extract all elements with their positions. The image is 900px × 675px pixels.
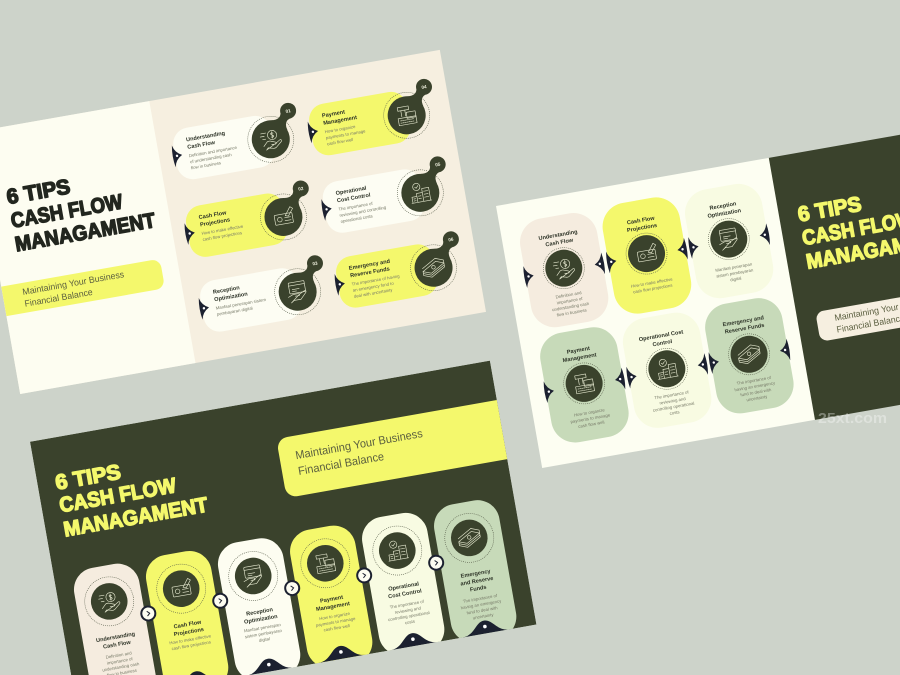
subtitle panel: Financial Balance xyxy=(297,451,385,478)
tip 05: operational cost control: The importance of xyxy=(338,201,374,212)
card: cash flow projections xyxy=(597,193,697,318)
tip 06: emergency and reserve funds: 06 xyxy=(448,237,454,242)
subtitle pill xyxy=(815,284,900,342)
tip 05: operational cost control xyxy=(317,155,454,236)
card: operational cost control: reviewing and xyxy=(659,396,687,406)
arrow 1 xyxy=(140,606,156,622)
tip 02: cash flow projections: Projections xyxy=(200,217,231,228)
step: operational cost control xyxy=(362,512,444,651)
card: reception optimization: Optimization xyxy=(707,208,742,220)
tip 03: reception optimization: Manfaat penerapan sistem xyxy=(215,297,267,311)
step: operational cost control: reviewing and xyxy=(394,605,422,615)
step: cash flow projections: Projections xyxy=(173,627,204,638)
tip 06: emergency and reserve funds: deal with uncertainty xyxy=(353,287,394,299)
step: cash flow projections: How to make effective xyxy=(169,633,212,646)
title: 6 TIPS xyxy=(54,461,123,495)
step: emergency and reserve funds xyxy=(434,500,516,638)
subtitle band: Maintaining Your Business xyxy=(22,269,125,297)
tip 05: operational cost control: reviewing and controlling xyxy=(339,205,387,218)
card: understanding cash flow: flow in business xyxy=(556,307,587,318)
step: reception optimization: Optimization xyxy=(244,614,279,626)
title xyxy=(55,464,208,538)
card: cash flow projections: Cash Flow xyxy=(627,216,656,226)
tip 01: understanding cash flow: Definition and importance xyxy=(188,145,238,158)
step: payment management: payments to manage xyxy=(315,616,356,628)
step: payment management xyxy=(290,526,372,664)
card: payment management: Payment xyxy=(566,346,591,356)
tip 03: reception optimization: 03 xyxy=(312,260,318,266)
tip 04: payment management: Management xyxy=(323,115,358,127)
title: CASH FLOW xyxy=(58,474,178,517)
tip 06: emergency and reserve funds: The importance of having xyxy=(351,273,400,287)
tip 06: emergency and reserve funds xyxy=(330,230,468,311)
step: understanding cash flow: understanding cash xyxy=(102,661,140,673)
tip 03: reception optimization: Reception xyxy=(213,285,241,296)
card: operational cost control xyxy=(618,309,717,432)
step: operational cost control: controlling operational xyxy=(388,610,430,622)
step: cash flow projections: cash flow projections xyxy=(171,639,211,651)
tip 05: operational cost control: 05 xyxy=(435,162,441,167)
tip 03: reception optimization xyxy=(194,254,332,335)
card: reception optimization: sistem pembayaran xyxy=(716,267,754,279)
step: understanding cash flow: Cash Flow xyxy=(103,640,132,651)
step: understanding cash flow: Understanding xyxy=(96,631,136,644)
panel: cream grid area xyxy=(496,158,816,468)
tip 01: understanding cash flow: Cash Flow xyxy=(187,140,216,151)
card: understanding cash flow: understanding cash xyxy=(552,301,590,312)
card: emergency and reserve funds: uncertainty xyxy=(746,394,768,402)
tip 03: reception optimization: Optimization xyxy=(214,291,249,303)
title: 6 TIPS xyxy=(5,175,72,209)
card: cash flow projections: Projections xyxy=(627,223,658,234)
step: emergency and reserve funds: and Reserve xyxy=(460,576,494,588)
card: reception optimization: Reception xyxy=(709,201,737,212)
title xyxy=(796,179,900,274)
tip 05: operational cost control: Operational xyxy=(335,186,367,197)
panel: beige body xyxy=(0,50,486,394)
step: understanding cash flow: Definition and xyxy=(105,650,133,660)
panel: cream title side xyxy=(0,101,195,394)
card: operational cost control: costs xyxy=(669,409,680,416)
panel: slide with tips as a card grid xyxy=(496,124,900,468)
arrow 5 xyxy=(428,554,444,571)
panel: dark background xyxy=(30,361,536,675)
panel: dark title side xyxy=(769,124,900,420)
step: reception optimization xyxy=(214,535,304,675)
card: operational cost control: Operational Cost xyxy=(638,329,684,343)
step: cash flow projections xyxy=(142,547,232,675)
tip 06: emergency and reserve funds: Reserve Funds xyxy=(350,266,390,279)
step: emergency and reserve funds: Funds xyxy=(470,585,487,594)
card: payment management: How to organize xyxy=(574,407,606,418)
step: operational cost control: The importance of xyxy=(389,599,425,610)
card: operational cost control: The importance of xyxy=(654,389,690,400)
step: payment management: cash flow well xyxy=(323,623,350,633)
step: emergency and reserve funds: uncertainty xyxy=(472,612,495,620)
tip 02: cash flow projections: How to make effective xyxy=(201,224,244,236)
step: reception optimization: sistem pembayaran xyxy=(244,628,283,639)
card: emergency and reserve funds: having an emergency xyxy=(734,380,776,392)
step: reception optimization: digital xyxy=(258,636,270,643)
title xyxy=(5,162,157,256)
step: payment management: How to organize xyxy=(319,611,351,621)
card: operational cost control: controlling operational xyxy=(652,401,695,413)
tip 06: emergency and reserve funds: an emergency fund to xyxy=(352,281,395,293)
title: MANAGAMENT xyxy=(13,209,157,256)
arrow 4 xyxy=(356,568,372,584)
card: reception optimization xyxy=(680,180,779,302)
subtitle panel: Maintaining Your Business xyxy=(295,428,424,462)
card: cash flow projections: cash flow projections xyxy=(633,283,673,294)
card: emergency and reserve funds: Reserve Funds xyxy=(724,323,765,336)
step: understanding cash flow: importance of xyxy=(106,656,134,666)
card: understanding cash flow xyxy=(515,209,614,331)
arrow 2 xyxy=(212,592,228,609)
step: operational cost control: Cost Control xyxy=(388,588,423,600)
tip 01: understanding cash flow: 01 xyxy=(285,108,292,114)
card: payment management: payments to manage xyxy=(570,412,611,424)
step: reception optimization: Reception xyxy=(246,607,274,618)
card: reception optimization: digital xyxy=(730,276,742,282)
step: cash flow projections: Cash Flow xyxy=(173,620,203,630)
tip 04: payment management: Payment xyxy=(322,109,346,119)
card: cash flow projections: How to make effective xyxy=(630,276,673,289)
card: emergency and reserve funds: Emergency and xyxy=(722,315,765,328)
tip 02: cash flow projections: cash flow projections xyxy=(202,230,242,242)
subtitle band xyxy=(1,259,165,316)
step: reception optimization: Manfaat penerapan xyxy=(244,622,282,633)
tip 05: operational cost control: operational costs xyxy=(340,213,373,224)
tip 01: understanding cash flow: flow in business xyxy=(191,160,221,170)
step: operational cost control: Operational xyxy=(388,581,420,593)
card: payment management xyxy=(535,323,634,447)
card: understanding cash flow: Cash Flow xyxy=(545,238,574,248)
tip 02: cash flow projections: Cash Flow xyxy=(198,210,228,221)
card: emergency and reserve funds xyxy=(700,294,799,417)
tip 04: payment management: payments to manage xyxy=(325,128,366,140)
card: understanding cash flow: Understanding xyxy=(538,229,579,242)
tip 04: payment management: 04 xyxy=(421,84,427,90)
tip 04: payment management: cash flow well xyxy=(327,137,354,146)
watermark: 25xt.com xyxy=(818,410,887,427)
tip 06: emergency and reserve funds: Emergency and xyxy=(348,259,391,272)
tip 01: understanding cash flow: Understanding xyxy=(186,131,226,143)
panel: slide with tips as a step timeline xyxy=(30,361,538,675)
tip 04: payment management xyxy=(303,78,441,158)
tip 01: understanding cash flow: of understanding cash xyxy=(190,152,233,164)
step: emergency and reserve funds: Emergency xyxy=(460,569,492,580)
tip 03: reception optimization: pembayaran digital xyxy=(216,306,253,317)
step: payment management: Management xyxy=(316,601,351,613)
title: CASH FLOW xyxy=(9,190,125,233)
card: emergency and reserve funds: fund to deal with xyxy=(740,387,772,397)
step: payment management: Payment xyxy=(320,595,344,605)
tip 02: cash flow projections: 02 xyxy=(298,186,304,192)
subtitle band: Financial Balance xyxy=(24,287,93,309)
tip 05: operational cost control: Cost Control xyxy=(337,192,371,204)
step: emergency and reserve funds: having an emergency xyxy=(460,598,502,610)
title: MANAGAMENT xyxy=(62,493,210,541)
tip 04: payment management: How to organize xyxy=(324,124,356,134)
card: operational cost control: Control xyxy=(652,339,673,348)
step: emergency and reserve funds: The importance of xyxy=(462,593,498,604)
step: emergency and reserve funds: fund to deal with xyxy=(466,605,498,615)
title: 6 TIPS xyxy=(796,193,863,226)
card: payment management: cash flow well xyxy=(578,419,605,429)
card: understanding cash flow: Definition and xyxy=(555,290,582,300)
card: understanding cash flow: importance of xyxy=(556,296,584,305)
card: emergency and reserve funds: The importance of xyxy=(736,375,772,386)
step: understanding cash flow xyxy=(74,564,156,675)
tip 01: understanding cash flow xyxy=(167,102,305,182)
subtitle panel xyxy=(276,400,507,498)
tip 02: cash flow projections xyxy=(180,179,318,260)
step: operational cost control: costs xyxy=(405,619,415,625)
card: payment management: Management xyxy=(562,352,597,364)
arrow 3 xyxy=(284,580,300,596)
panel: slide with tips in two columns xyxy=(0,50,486,394)
card: reception optimization: Manfaat penerapan xyxy=(715,261,753,273)
